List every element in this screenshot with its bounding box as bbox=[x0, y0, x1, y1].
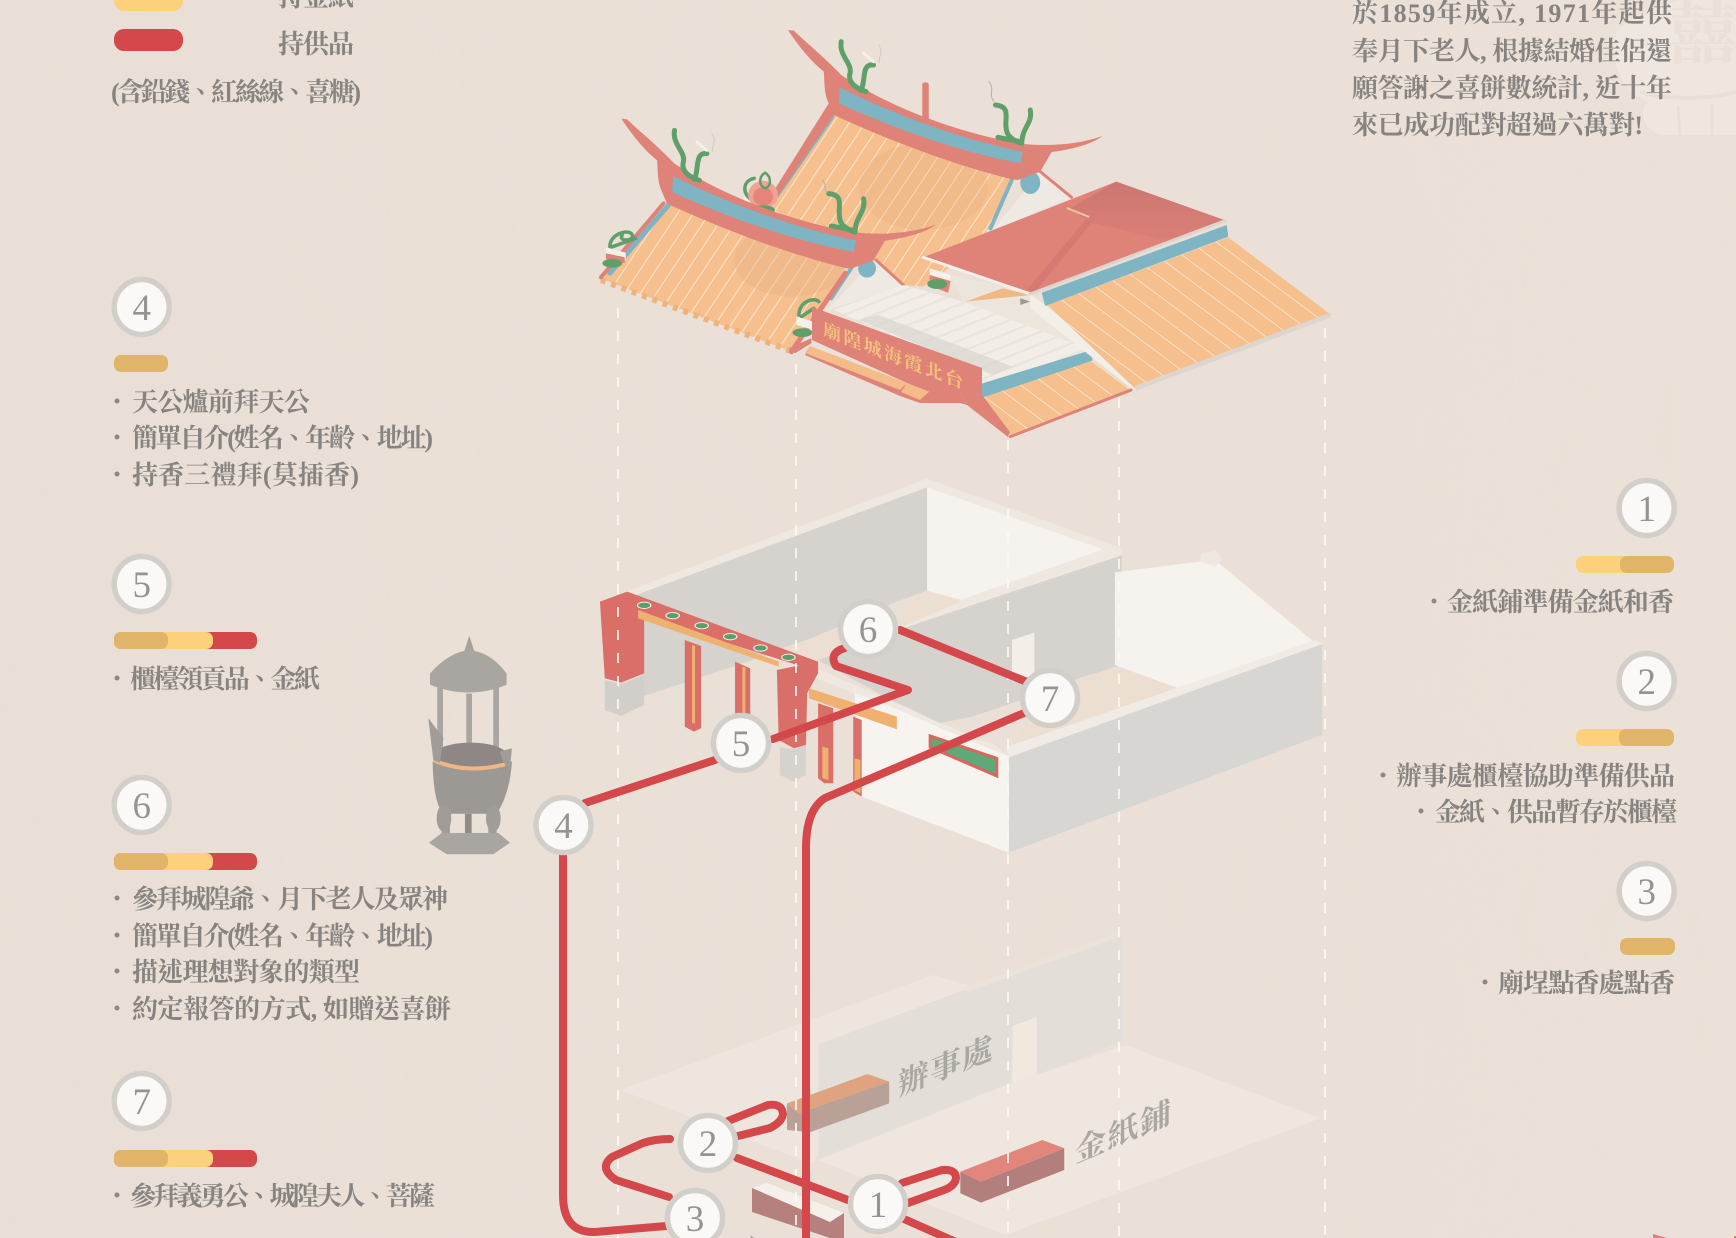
legend swatch: offerings bbox=[114, 29, 183, 51]
panel: step 4 bbox=[114, 280, 433, 490]
panel: intro text: 願答謝之喜餅數統計, 近十年 bbox=[1352, 73, 1672, 103]
temple walls middle level bbox=[600, 479, 1322, 853]
panel: step 6: 參拜城隍爺、月下老人及眾神 bbox=[132, 885, 448, 914]
back roof blue band bbox=[839, 87, 1023, 163]
legend note: (含鉛錢、紅絲線、喜糖) bbox=[111, 77, 361, 107]
panel: step 2: 2 bbox=[1637, 662, 1656, 703]
stop marker 6: 6 bbox=[859, 610, 877, 651]
panel: step 6 bbox=[114, 778, 451, 1024]
panel: step 1 bbox=[1432, 480, 1674, 617]
floor plan: ground level bbox=[621, 932, 1321, 1235]
legend label: offerings: 持供品 bbox=[278, 30, 354, 59]
panel: step 4: 4 bbox=[132, 288, 151, 329]
board text: 廟隍城海霞北台 bbox=[823, 319, 964, 394]
panel: step 6: 約定報答的方式, 如贈送喜餅 bbox=[132, 995, 451, 1024]
lotus ornament bbox=[744, 173, 778, 216]
stop marker 2: 2 bbox=[699, 1124, 717, 1165]
panel: intro text: 奉月下老人, 根據結婚佳侶還 bbox=[1352, 36, 1672, 66]
panel: step 3: 3 bbox=[1637, 872, 1656, 913]
door strip bbox=[1012, 633, 1034, 682]
panel: step 2: 辦事處櫃檯協助準備供品 bbox=[1396, 761, 1675, 791]
stop marker 4 bbox=[536, 798, 591, 852]
counter: office bbox=[787, 1074, 889, 1132]
gate ornaments bbox=[637, 602, 796, 661]
legend swatch: gold paper bbox=[114, 0, 183, 11]
front roof eave tiles bbox=[601, 280, 790, 351]
office wall bbox=[819, 932, 1123, 1158]
white hall roof bbox=[834, 285, 1091, 385]
corner edge bbox=[960, 393, 1010, 437]
stop marker 1: 1 bbox=[869, 1185, 887, 1226]
stop marker 6 bbox=[840, 602, 896, 656]
front roof orange bbox=[600, 203, 845, 352]
panel: step 2 bbox=[1380, 654, 1677, 827]
panel: step 4: 簡單自介(姓名、年齡、地址) bbox=[132, 423, 433, 453]
stop marker 7: 7 bbox=[1041, 679, 1059, 720]
dragons: back roof bbox=[841, 42, 1031, 143]
panel: step 7: 7 bbox=[132, 1082, 151, 1123]
front white wall bbox=[812, 673, 1009, 853]
counter: gold paper shop bbox=[960, 1140, 1064, 1203]
stop marker 5: 5 bbox=[732, 724, 750, 765]
gate columns bbox=[600, 592, 897, 797]
panel: step 5: 5 bbox=[132, 565, 151, 606]
panel: step 5 bbox=[114, 556, 320, 694]
panel: step 6: 描述理想對象的類型 bbox=[132, 958, 360, 987]
front roof edges bbox=[831, 268, 851, 298]
front gable bbox=[826, 259, 904, 311]
stop marker 2 bbox=[680, 1116, 736, 1170]
stop marker 7 bbox=[1022, 670, 1078, 726]
back roof ridge bbox=[768, 30, 1102, 205]
temple roofs bbox=[600, 30, 1331, 437]
panel: step 4: 持香三禮拜(莫插香) bbox=[132, 461, 359, 490]
right hall orange roof bbox=[1048, 237, 1331, 391]
panel: step 5: 櫃檯領貢品、金紙 bbox=[130, 664, 320, 694]
board bbox=[812, 307, 982, 395]
back roof orange bbox=[772, 114, 1012, 287]
label: gold paper shop: 金紙鋪 bbox=[1075, 1094, 1171, 1170]
panel: step 1: 金紙鋪準備金紙和香 bbox=[1447, 588, 1674, 617]
white gable wall bbox=[1115, 551, 1315, 688]
counter: incense point bbox=[752, 1183, 844, 1238]
watermark seal bbox=[1614, 0, 1736, 135]
stop marker 5 bbox=[714, 716, 768, 770]
back left wall bbox=[633, 487, 927, 697]
censer bbox=[428, 636, 512, 854]
front hall signboard bbox=[805, 307, 1010, 437]
floor patch right bbox=[1012, 667, 1179, 747]
front roof ridge bbox=[621, 119, 936, 269]
panel: step 7 bbox=[114, 1074, 435, 1211]
stop marker 3 bbox=[668, 1190, 722, 1238]
right gray wall front bbox=[1009, 644, 1322, 853]
right wall cap bbox=[1006, 640, 1322, 757]
panel: intro text bbox=[1352, 0, 1674, 140]
green sign bbox=[930, 736, 997, 776]
floor patch bbox=[782, 592, 960, 660]
lower eave bbox=[805, 350, 967, 405]
right hall blue band bbox=[1042, 225, 1228, 306]
stop marker 4: 4 bbox=[554, 806, 573, 847]
right gray wall bbox=[818, 555, 1122, 723]
panel: step 2: 金紙、供品暫存於櫃檯 bbox=[1435, 797, 1677, 827]
front hall blue band bbox=[980, 350, 1092, 399]
label: office: 辦事處 bbox=[898, 1030, 993, 1103]
floor: office bbox=[621, 975, 1005, 1163]
courtyard bbox=[927, 268, 1145, 390]
panel: step 3: 廟埕點香處點香 bbox=[1498, 969, 1675, 998]
panel: step 4: 天公爐前拜天公 bbox=[132, 388, 311, 417]
back gable bbox=[993, 171, 1073, 230]
stop marker 1 bbox=[850, 1176, 906, 1232]
panel: step 1: 1 bbox=[1637, 489, 1656, 530]
pole bbox=[922, 82, 929, 121]
panel: step 6: 簡單自介(姓名、年齡、地址) bbox=[132, 921, 433, 951]
panel: step 7: 參拜義勇公、城隍夫人、菩薩 bbox=[130, 1182, 435, 1211]
corner ornament middle bbox=[789, 300, 819, 353]
panel: legend bbox=[111, 0, 361, 107]
route line bbox=[563, 630, 1027, 1238]
corner fragments bbox=[1653, 1234, 1736, 1238]
right hall red roof bbox=[923, 182, 1225, 294]
back inner wall bbox=[927, 487, 1109, 601]
right white gutter bbox=[1030, 294, 1145, 390]
front hall roof bbox=[980, 361, 1131, 437]
floor: gold paper shop bbox=[819, 1045, 1321, 1235]
corner ornament left bbox=[602, 232, 636, 268]
panel: step 3 bbox=[1482, 864, 1675, 998]
panel: step 6: 6 bbox=[132, 786, 151, 827]
wall cap bbox=[625, 479, 1122, 628]
dashed projection lines bbox=[618, 308, 1325, 1238]
panel: intro text: 來已成功配對超過六萬對! bbox=[1352, 111, 1643, 140]
